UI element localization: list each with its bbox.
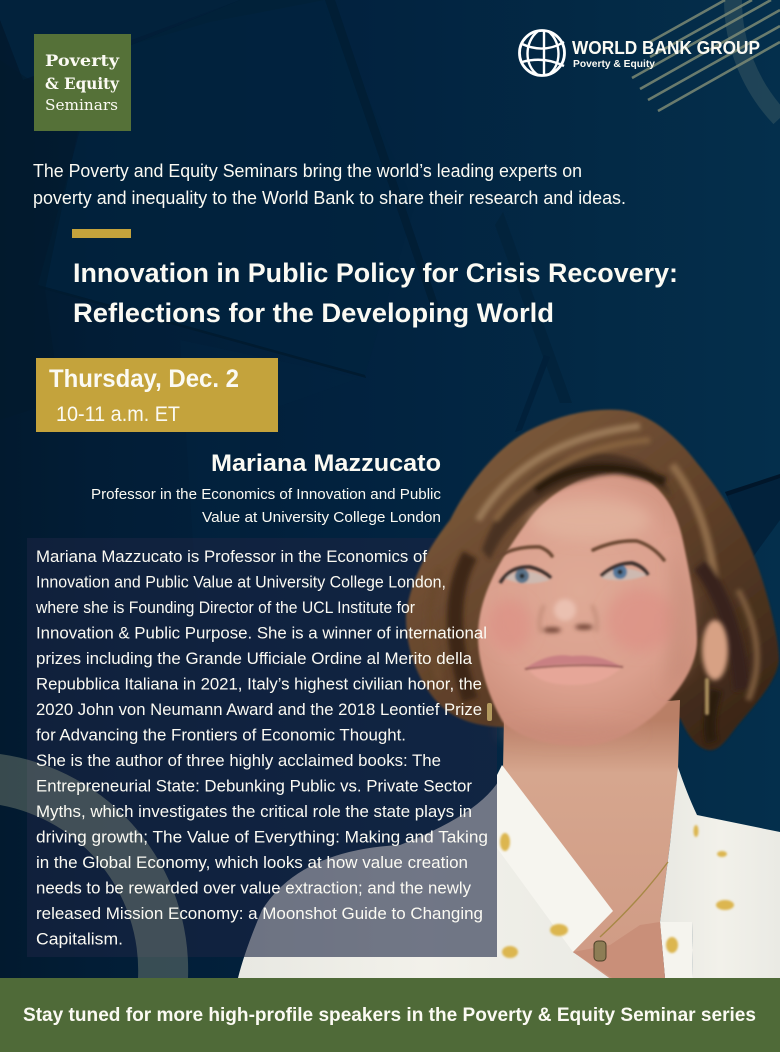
- nose: [540, 599, 597, 633]
- speaker affiliation: Professor in the Economics of Innovation and Public: [91, 487, 441, 503]
- necklace: [600, 862, 668, 937]
- speaker biography: Mariana Mazzucato is Professor in the Economics of: [36, 547, 427, 566]
- earring: [705, 678, 709, 715]
- decorative stripes: top right: [632, 0, 780, 111]
- speaker biography: Innovation and Public Value at University College London,: [36, 572, 446, 592]
- footer banner: Stay tuned for more high-profile speakers in the Poverty & Equity Seminar series: [23, 1004, 756, 1026]
- speaker biography: 2020 John von Neumann Award and the 2018 Leontief Prize: [36, 700, 482, 719]
- bio background panel: [27, 538, 497, 957]
- shirt collar: [497, 765, 613, 952]
- seminar badge: & Equity: [45, 74, 120, 93]
- event title: [73, 258, 678, 328]
- ear: [702, 620, 728, 680]
- speaker biography: in the Global Economy, which looks at how value creation: [36, 853, 468, 872]
- speaker biography: prizes including the Grande Ufficiale Ordine al Merito della: [36, 649, 473, 668]
- date and time box: [36, 358, 278, 432]
- speaker biography: Repubblica Italiana in 2021, Italy’s highest civilian honor, the: [36, 674, 482, 694]
- speaker affiliation: [91, 487, 441, 526]
- speaker biography: needs to be rewarded over value extraction; and the newly: [36, 878, 471, 898]
- event title: Innovation in Public Policy for Crisis Recovery:: [73, 258, 678, 288]
- eyes: [500, 563, 648, 584]
- speaker biography: where she is Founding Director of the UCL Institute for: [35, 598, 415, 617]
- icon: globe: [520, 30, 564, 76]
- hair highlights: [430, 465, 757, 742]
- gold accent bar: [72, 229, 131, 238]
- seminar badge: [34, 34, 131, 131]
- speaker biography: [35, 547, 488, 948]
- footer banner: [0, 978, 780, 1052]
- speaker biography: driving growth; The Value of Everything: Making and Taking: [36, 828, 488, 846]
- speaker biography: Innovation & Public Purpose. She is a winner of international: [36, 624, 487, 642]
- event title: Reflections for the Developing World: [73, 298, 554, 328]
- speaker affiliation: Value at University College London: [202, 510, 441, 526]
- mouth: [525, 655, 623, 685]
- cheeks and shading: [488, 500, 695, 741]
- seminar badge: Seminars: [45, 98, 118, 114]
- speaker biography: Entrepreneurial State: Debunking Public vs. Private Sector: [36, 776, 472, 796]
- World Bank Group logo: [520, 30, 760, 76]
- intro text: The Poverty and Equity Seminars bring the world’s leading experts on: [33, 160, 582, 181]
- seminar badge: Poverty: [45, 51, 120, 70]
- speaker biography: Myths, which investigates the critical role the state plays in: [36, 802, 472, 821]
- date and time box: 10-11 a.m. ET: [56, 403, 180, 426]
- neck: [503, 700, 680, 980]
- World Bank Group logo: Poverty & Equity: [573, 58, 655, 70]
- speaker biography: She is the author of three highly acclaimed books: The: [36, 751, 441, 770]
- shirt: right side: [660, 767, 780, 978]
- hair: [406, 410, 779, 750]
- shirt motifs: [500, 825, 734, 958]
- intro text: poverty and inequality to the World Bank to share their research and ideas.: [33, 187, 626, 208]
- intro text: [33, 160, 626, 208]
- World Bank Group logo: WORLD BANK GROUP: [572, 37, 760, 58]
- speaker biography: released Mission Economy: a Moonshot Guide to Changing: [36, 904, 483, 923]
- face: [478, 470, 697, 746]
- hair fringe over forehead: [478, 426, 672, 560]
- eyebrows: [497, 541, 664, 560]
- portrait of Mariana Mazzucato: [406, 410, 780, 980]
- speaker biography: for Advancing the Frontiers of Economic Thought.: [36, 726, 406, 744]
- date and time box: Thursday, Dec. 2: [49, 365, 239, 393]
- decorative arc: top right: [733, 0, 780, 118]
- shirt: shoulder behind bio panel: [238, 770, 613, 978]
- speaker biography: Capitalism.: [36, 930, 123, 948]
- decorative arc: bottom left: [0, 754, 188, 978]
- speaker name: Mariana Mazzucato: [211, 450, 441, 477]
- earring: left: [487, 703, 492, 721]
